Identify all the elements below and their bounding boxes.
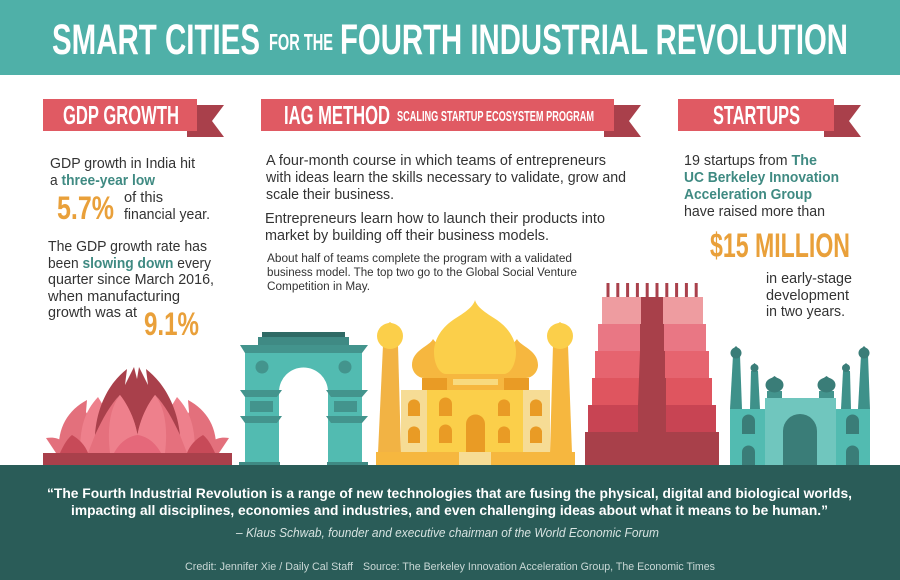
- ribbon heading: GDP growth: [43, 99, 224, 137]
- text block: GDP growth: The GDP growth rate has: [48, 239, 207, 255]
- illustration: gopuram temple tower: [585, 283, 719, 465]
- text block: startups: development: [766, 288, 849, 304]
- text block: IAG method: Entrepreneurs learn how to launch their products into: [265, 211, 605, 227]
- text block: IAG method: [265, 153, 626, 293]
- quote: “The Fourth Industrial Revolution is a range of new technologies that are fusing the physical, digital and biological worlds,: [47, 485, 852, 501]
- text block: startups: in two years.: [766, 304, 845, 320]
- ribbon heading: IAG method: [261, 99, 641, 137]
- title banner: SMART CITIES: [52, 16, 260, 64]
- text block: startups: 19 startups from The: [684, 153, 817, 169]
- text block: IAG method: About half of teams complete the program with a validated: [267, 253, 572, 265]
- ribbon heading: GDP growth: GDP GROWTH: [63, 102, 179, 130]
- text block: GDP growth: growth was at: [48, 305, 137, 321]
- illustration: Taj Mahal: [376, 300, 575, 465]
- text block: startups: in early-stage: [766, 271, 852, 287]
- illustration: mosque: [730, 346, 870, 465]
- illustration: India Gate: [239, 332, 368, 465]
- text block: GDP growth: been slowing down every: [48, 256, 212, 272]
- credits and sources: Source: The Berkeley Innovation Acceleration Group, The Economic Times: [363, 561, 715, 573]
- text block: IAG method: Competition in May.: [267, 281, 370, 293]
- footer band with quote and credits: [0, 465, 900, 580]
- ribbon heading: startups: STARTUPS: [713, 102, 800, 130]
- text block: startups: Acceleration Group: [684, 187, 812, 203]
- title banner: [0, 0, 900, 75]
- text block: IAG method: scale their business.: [266, 187, 394, 203]
- quote: [47, 485, 852, 518]
- ribbon heading: IAG method: IAG METHOD: [284, 102, 390, 130]
- text block: startups: UC Berkeley Innovation: [684, 170, 839, 186]
- illustration: lotus temple: [43, 367, 232, 465]
- text block: startups: [684, 153, 852, 320]
- text block: IAG method: market by building off their business models.: [265, 228, 549, 244]
- text block: GDP growth: GDP growth in India hit: [50, 156, 195, 172]
- text block: IAG method: with ideas learn the skills necessary to validate, grow and: [265, 170, 626, 186]
- ribbon heading: startups: [678, 99, 861, 137]
- ribbon heading: IAG method: SCALING STARTUP ECOSYSTEM PROGRAM: [397, 109, 594, 125]
- title banner: FOR THE: [269, 29, 333, 55]
- text block: GDP growth: 9.1%: [144, 306, 199, 342]
- text block: IAG method: A four-month course in which teams of entrepreneurs: [266, 153, 606, 169]
- text block: GDP growth: of this: [124, 190, 163, 206]
- credits and sources: Credit: Jennifer Xie / Daily Cal Staff: [185, 561, 354, 573]
- text block: GDP growth: a three-year low: [50, 173, 156, 189]
- text block: GDP growth: when manufacturing: [47, 289, 180, 305]
- text block: GDP growth: [47, 156, 214, 342]
- credits and sources: [185, 561, 715, 573]
- text block: IAG method: business model. The top two go to the Global Social Venture: [267, 267, 577, 279]
- text block: startups: have raised more than: [684, 204, 825, 220]
- text block: GDP growth: quarter since March 2016,: [48, 272, 214, 288]
- quote: impacting all disciplines, economies and industries, and even challenging ideas about what it means to be human.”: [71, 502, 828, 518]
- text block: GDP growth: 5.7%: [57, 190, 114, 226]
- text block: GDP growth: financial year.: [124, 207, 210, 223]
- quote attribution: – Klaus Schwab, founder and executive chairman of the World Economic Forum: [235, 526, 659, 540]
